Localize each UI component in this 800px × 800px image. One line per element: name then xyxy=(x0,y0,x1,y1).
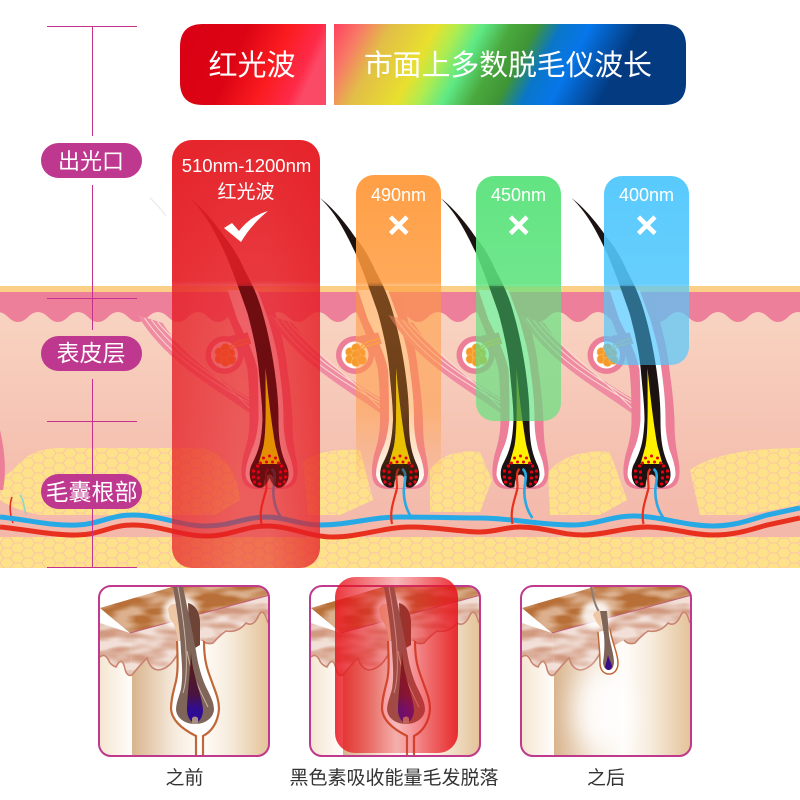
hair follicle 4 xyxy=(520,198,680,524)
fat cells xyxy=(0,448,800,568)
hair follicle 1 xyxy=(138,198,298,524)
caption: before: 之前 xyxy=(165,767,204,789)
overlay column: 400nm: 400nm xyxy=(619,185,674,205)
left edge follicle sliver xyxy=(0,430,5,490)
blood vessel: vein xyxy=(0,508,800,526)
icon: cross xyxy=(510,217,527,234)
overlay column: 490nm: 490nm xyxy=(371,185,426,205)
label: epidermis xyxy=(41,336,142,371)
label: follicle root xyxy=(41,474,142,509)
hair follicle 2 xyxy=(268,198,428,524)
panel: melanin absorbs energy xyxy=(309,585,481,757)
dermis background xyxy=(0,290,800,568)
icon: cross xyxy=(390,217,407,234)
header: common device wavelengths xyxy=(334,24,686,105)
label: light outlet xyxy=(41,143,142,178)
vertical and horizontal scale lines xyxy=(47,26,137,568)
panel: after xyxy=(520,585,692,757)
icon: cross xyxy=(638,217,655,234)
panel: before xyxy=(98,585,270,757)
epidermis band xyxy=(0,292,800,322)
overlay column: 450nm xyxy=(476,176,561,421)
overlay column: 490nm xyxy=(356,175,441,484)
label: epidermis: 表皮层 xyxy=(56,340,126,366)
overlay column: red light 510-1200nm: 510nm-1200nm xyxy=(182,155,311,176)
blood vessel: artery xyxy=(0,518,800,537)
overlay column: 450nm: 450nm xyxy=(491,185,546,205)
caption: melanin absorbs energy, hair falls out: 黑色素吸收能量毛发脱落 xyxy=(289,767,499,789)
overlay column: 400nm xyxy=(604,176,689,365)
label: follicle root: 毛囊根部 xyxy=(46,479,138,505)
overlay column: red light 510-1200nm xyxy=(172,140,320,568)
skin cross-section xyxy=(0,198,800,568)
header: common device wavelengths: 市面上多数脱毛仪波长 xyxy=(364,50,652,82)
tan surface strip xyxy=(0,286,800,292)
red light overlay on middle panel xyxy=(335,577,458,753)
label: light outlet: 出光口 xyxy=(58,149,124,174)
overlay column: red light 510-1200nm: 红光波 xyxy=(217,181,275,203)
icon: check mark xyxy=(224,211,268,242)
caption: after: 之后 xyxy=(587,767,625,789)
header: red light wave xyxy=(180,24,326,105)
hair follicle 3 xyxy=(388,198,549,524)
header: red light wave: 红光波 xyxy=(208,49,296,82)
faint hair trace left of red column xyxy=(150,198,166,216)
small vessel branches at left edge xyxy=(10,495,26,523)
